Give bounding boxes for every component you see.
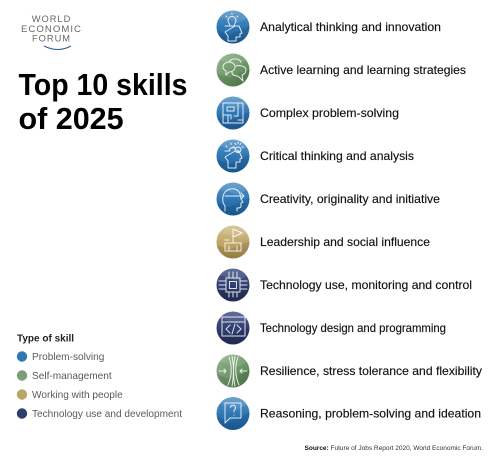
skill 4: critical thinking: [216, 139, 414, 173]
source: Source: Future of Jobs Report 2020, World Economic Forum.: [304, 445, 483, 452]
skill 7: technology use: [216, 268, 472, 302]
logo: World Economic Forum: WORLD: [32, 14, 71, 24]
skill 6: leadership: [216, 225, 430, 259]
skill 8: technology design: [216, 311, 446, 345]
skill 7: technology use: Technology use, monitoring and control: [260, 278, 472, 292]
legend: type of skill: Self-management: [32, 371, 112, 382]
skill 8: technology design: Technology design and programming: [260, 321, 446, 335]
skill 3: complex problem-solving: [216, 96, 399, 130]
logo: World Economic Forum: ECONOMIC: [21, 24, 82, 34]
legend: type of skill: Technology use and development: [32, 409, 182, 420]
skill 4: critical thinking: Critical thinking and analysis: [260, 149, 414, 163]
skill 9: resilience: Resilience, stress tolerance and flexibility: [260, 364, 482, 378]
legend: type of skill: Type of skill: [17, 334, 74, 344]
logo: World Economic Forum: [21, 14, 82, 50]
skill 10: reasoning: [216, 397, 481, 430]
skill 5: creativity: [216, 182, 440, 216]
skill 10: reasoning: Reasoning, problem-solving and ideation: [260, 406, 481, 420]
legend: type of skill: Problem-solving: [32, 352, 104, 363]
skill 2: active learning: [216, 53, 466, 87]
title: Top 10 skills: [18, 68, 188, 102]
skill 1: analytical thinking: [216, 10, 441, 44]
legend: type of skill: [17, 334, 182, 420]
skill 3: complex problem-solving: Complex problem-solving: [260, 106, 399, 120]
legend: type of skill: Working with people: [32, 390, 123, 401]
skill 1: analytical thinking: Analytical thinking and innovation: [260, 20, 441, 34]
title: [18, 68, 188, 136]
skill 2: active learning: Active learning and learning strategies: [260, 63, 466, 77]
skill 6: leadership: Leadership and social influence: [260, 235, 430, 249]
skill 9: resilience: [216, 354, 482, 388]
skill 5: creativity: Creativity, originality and initiative: [260, 192, 440, 206]
title: of 2025: [18, 102, 124, 136]
logo: World Economic Forum: FORUM: [32, 34, 71, 44]
